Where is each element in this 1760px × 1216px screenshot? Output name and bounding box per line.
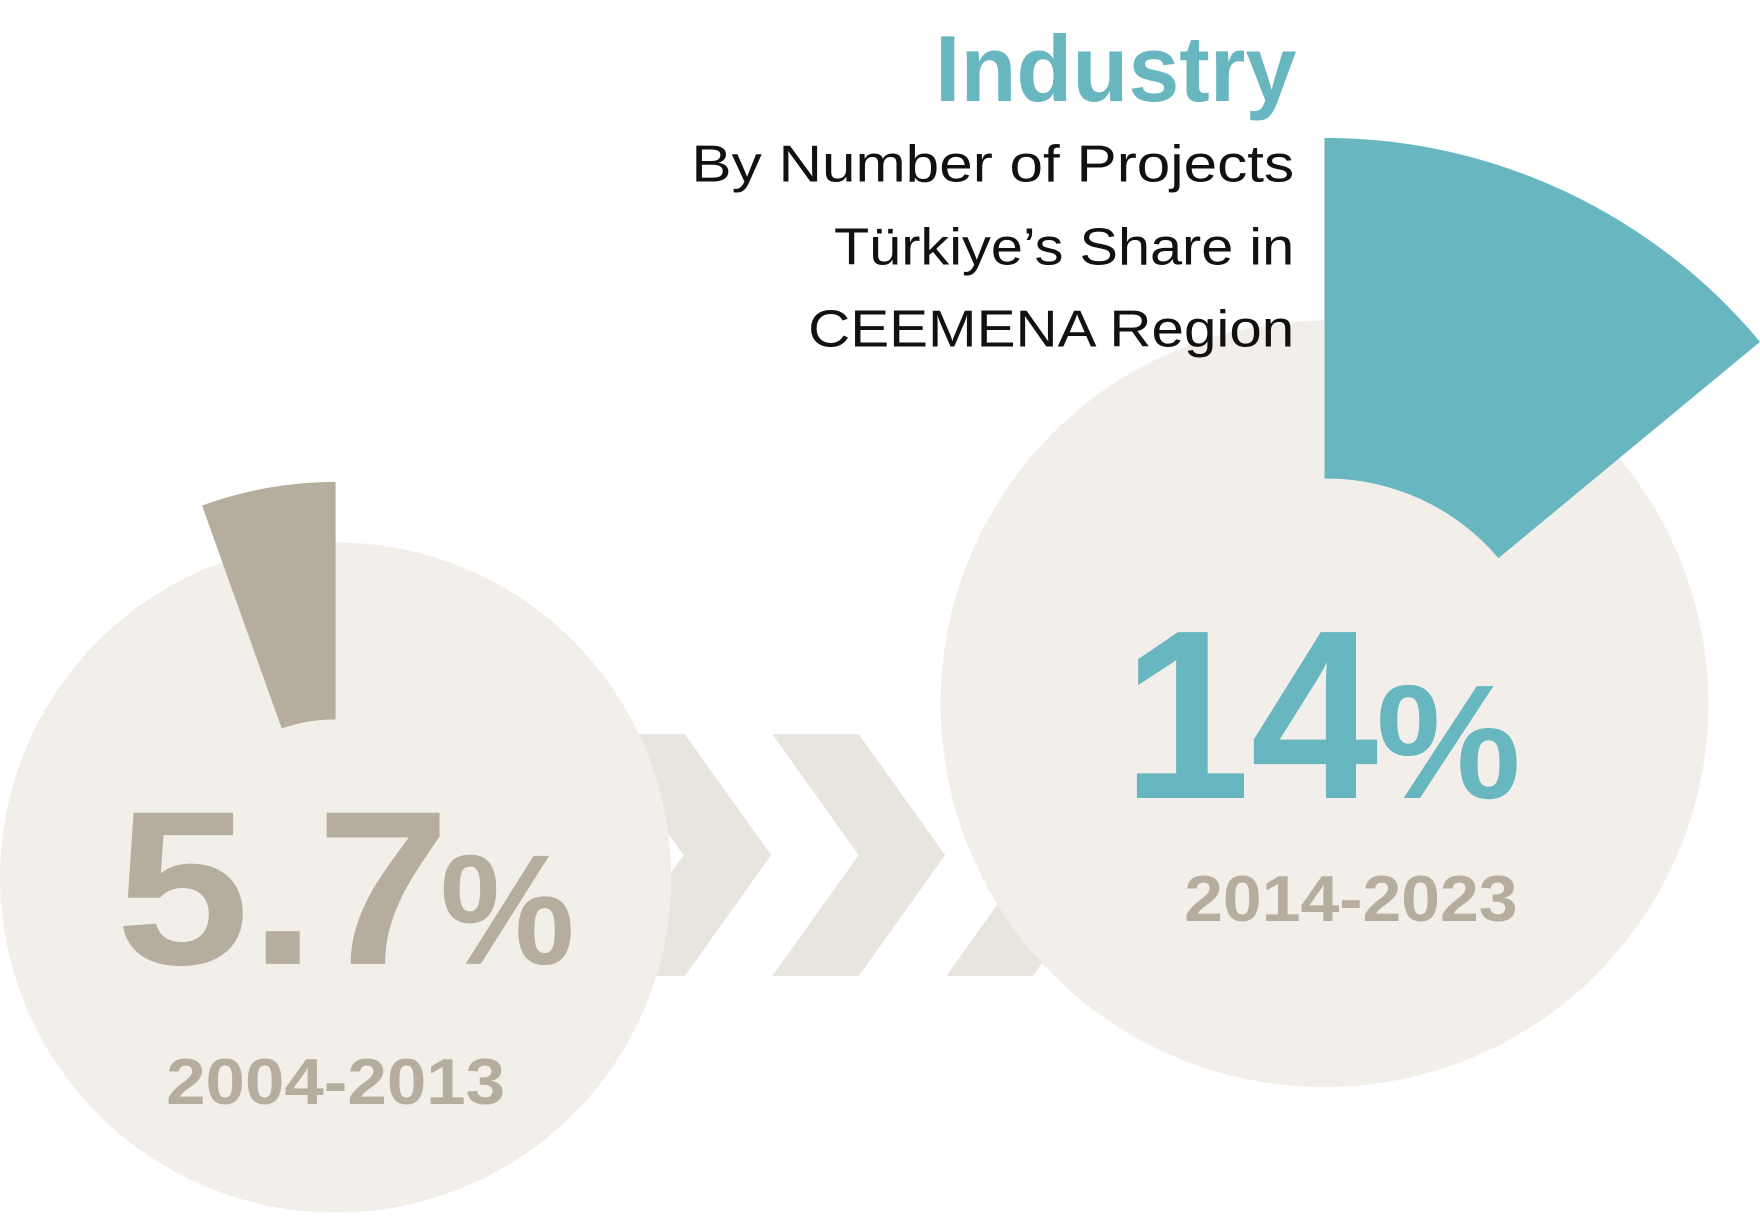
- panel: 2014-2023 circle: [941, 321, 1708, 1087]
- subtitle: [691, 135, 1294, 357]
- panel: 2004-2013 circle: [0, 542, 671, 1213]
- value: 5.7%: 5.7: [116, 765, 450, 1011]
- text: %: [440, 823, 575, 998]
- wedge: 5.7% share: [202, 482, 336, 728]
- year: 2014-2023: 2014-2023: [1184, 862, 1518, 935]
- subtitle: CEEMENA Region: [808, 299, 1294, 357]
- text: %: [1376, 652, 1521, 833]
- subtitle: By Number of Projects: [691, 135, 1294, 193]
- value: 14%: 14: [1122, 581, 1378, 850]
- title: Industry: [935, 16, 1296, 121]
- year: 2004-2013: 2004-2013: [166, 1045, 505, 1118]
- subtitle: Türkiye’s Share in: [834, 218, 1294, 275]
- chevron arrows: [597, 734, 1119, 976]
- wedge: 14% share: [1324, 138, 1760, 558]
